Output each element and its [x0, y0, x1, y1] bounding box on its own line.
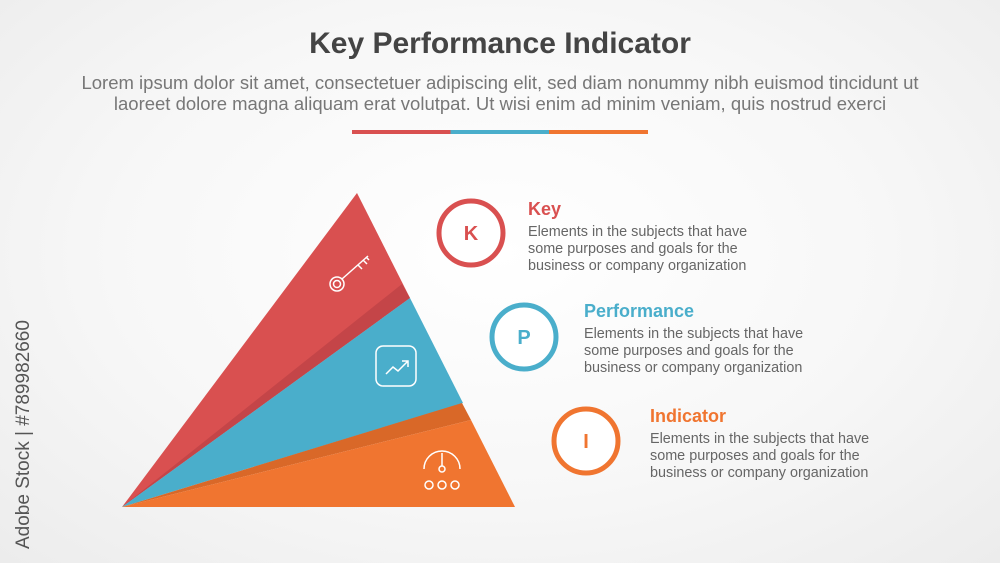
circle I	[554, 409, 618, 473]
text: Performance	[584, 301, 803, 376]
circle I: I	[583, 431, 589, 453]
icon: key	[330, 256, 369, 291]
text: Performance: Elements in the subjects that have	[584, 326, 803, 342]
text: Indicator: Elements in the subjects that have	[650, 431, 869, 447]
text: Performance: Performance	[584, 301, 694, 321]
text: Key: some purposes and goals for the	[528, 241, 738, 257]
side watermark text: Adobe Stock | #789982660	[13, 320, 34, 549]
text: Indicator	[650, 406, 869, 481]
text: Key	[528, 199, 747, 274]
subtitle text: Lorem ipsum dolor sit amet, consectetuer adipiscing elit, sed diam nonummy nibh euismod tincidunt ut	[81, 72, 919, 93]
divider colored	[352, 130, 648, 134]
icon: gauge	[424, 451, 460, 489]
text: Performance: business or company organization	[584, 360, 802, 376]
icon: chart	[376, 346, 416, 386]
circle K: K	[464, 223, 479, 245]
text: Indicator: business or company organization	[650, 465, 868, 481]
text: Performance: some purposes and goals for the	[584, 343, 794, 359]
circle P: P	[517, 327, 531, 349]
title: Key Performance Indicator	[309, 27, 691, 60]
circle P	[492, 305, 556, 369]
text: Indicator: some purposes and goals for the	[650, 448, 860, 464]
subtitle text: laoreet dolore magna aliquam erat volutpat. Ut wisi enim ad minim veniam, quis nostrud exerci	[114, 93, 886, 114]
subtitle text	[81, 72, 919, 114]
text: Key: business or company organization	[528, 258, 746, 274]
circle K	[439, 201, 503, 265]
text: Key: Elements in the subjects that have	[528, 224, 747, 240]
text: Key: Key	[528, 199, 561, 219]
text: Indicator: Indicator	[650, 406, 726, 426]
